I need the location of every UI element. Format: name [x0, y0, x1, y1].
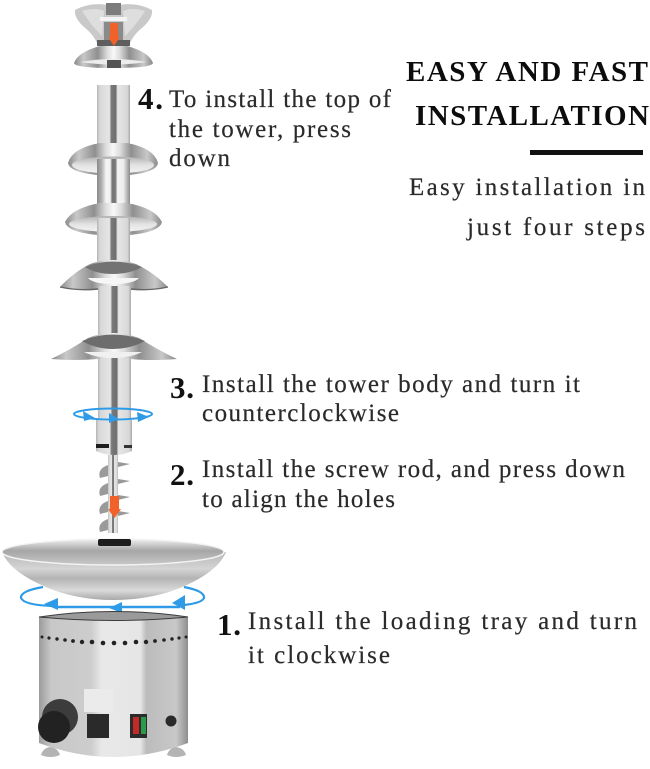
step 3: [170, 370, 580, 427]
step 4: To install the top of: [169, 86, 392, 113]
subheading: Easy installation in: [409, 174, 646, 201]
step 4: down: [169, 145, 230, 172]
illustration: fountain tower top cap: [74, 3, 153, 68]
rocker switches: [130, 714, 147, 738]
step 3: Install the tower body and turn it: [202, 371, 580, 398]
icon: temperature dial: [38, 699, 78, 743]
illustration: coupling and screw rod: [96, 420, 132, 533]
step 4: 4.: [138, 81, 163, 116]
heading: [406, 56, 649, 132]
subheading: just four steps: [466, 214, 645, 241]
step 1: Install the loading tray and turn: [248, 608, 638, 635]
illustration: loading tray: [2, 539, 226, 600]
step 2: to align the holes: [202, 486, 395, 513]
step 1: [217, 607, 638, 669]
step 4: the tower, press: [169, 116, 351, 143]
subheading: [409, 174, 646, 241]
tier 2: [65, 203, 162, 235]
power socket: [87, 714, 109, 738]
step 2: [170, 456, 626, 513]
step 1: 1.: [217, 607, 241, 642]
indicator light: [166, 716, 176, 726]
tier 3: [60, 260, 168, 290]
icon: orange down arrow: [108, 23, 120, 46]
icon: orange down arrow on screw: [108, 496, 121, 518]
icon: blue rotation arrows on tray: [21, 587, 204, 613]
divider bar: [530, 150, 643, 155]
top column: [97, 85, 130, 145]
feet: [41, 747, 186, 757]
step 3: 3.: [170, 370, 194, 405]
step 1: it clockwise: [248, 642, 390, 669]
step 4: [138, 81, 392, 172]
illustration: fountain tower column with tiers: [51, 85, 177, 418]
tier 4: [51, 333, 177, 360]
illustration: heater base unit: [38, 612, 188, 757]
heading: EASY AND FAST: [406, 56, 648, 88]
tier 1: [68, 143, 158, 175]
label plate: [84, 689, 113, 712]
heading: INSTALLATION: [415, 100, 649, 132]
step 2: 2.: [170, 457, 194, 492]
icon: blue rotation arrows on tower: [74, 408, 152, 423]
step 3: counterclockwise: [202, 400, 399, 427]
step 2: Install the screw rod, and press down: [202, 456, 626, 483]
vent holes: [40, 636, 188, 645]
